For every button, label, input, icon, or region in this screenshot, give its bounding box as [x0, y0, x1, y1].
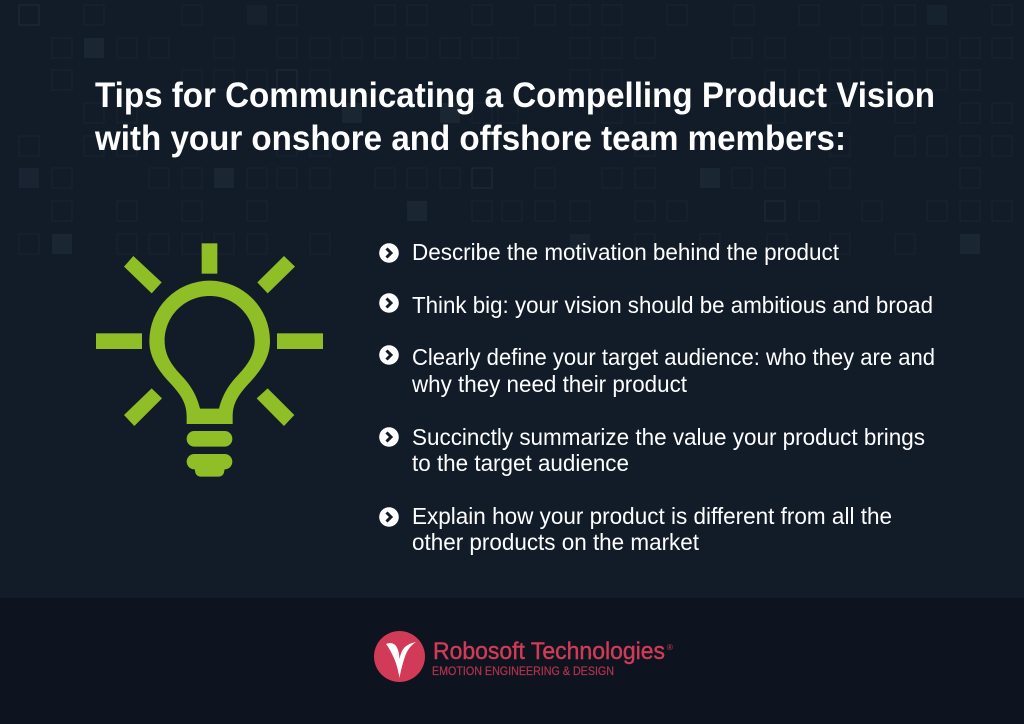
registered mark: ®	[667, 643, 673, 652]
footer band	[0, 598, 1024, 724]
tip 4	[379, 424, 925, 476]
tip 3: why they need their product	[411, 371, 688, 397]
icon: green light bulb	[96, 243, 323, 477]
title: with your onshore and offshore team members:	[94, 119, 846, 158]
tip 4: to the target audience	[412, 450, 629, 476]
logo mark	[374, 631, 425, 682]
tip 5: Explain how your product is different from all the	[412, 503, 892, 529]
tagline: EMOTION ENGINEERING & DESIGN	[432, 666, 614, 678]
title	[94, 76, 935, 158]
tip 3	[379, 344, 935, 397]
tip 3: Clearly define your target audience: who they are and	[412, 344, 935, 370]
tip 5: other products on the market	[412, 529, 700, 555]
tip 5	[379, 503, 892, 555]
tip 4: Succinctly summarize the value your product brings	[412, 424, 925, 450]
title: Tips for Communicating a Compelling Product Vision	[95, 76, 935, 115]
tip 2: Think big: your vision should be ambitious and broad	[412, 292, 933, 318]
company name: Robosoft Technologies	[433, 638, 665, 665]
logo: Robosoft Technologies	[374, 631, 673, 682]
tips list	[379, 239, 935, 555]
tip 1: Describe the motivation behind the product	[412, 239, 840, 265]
